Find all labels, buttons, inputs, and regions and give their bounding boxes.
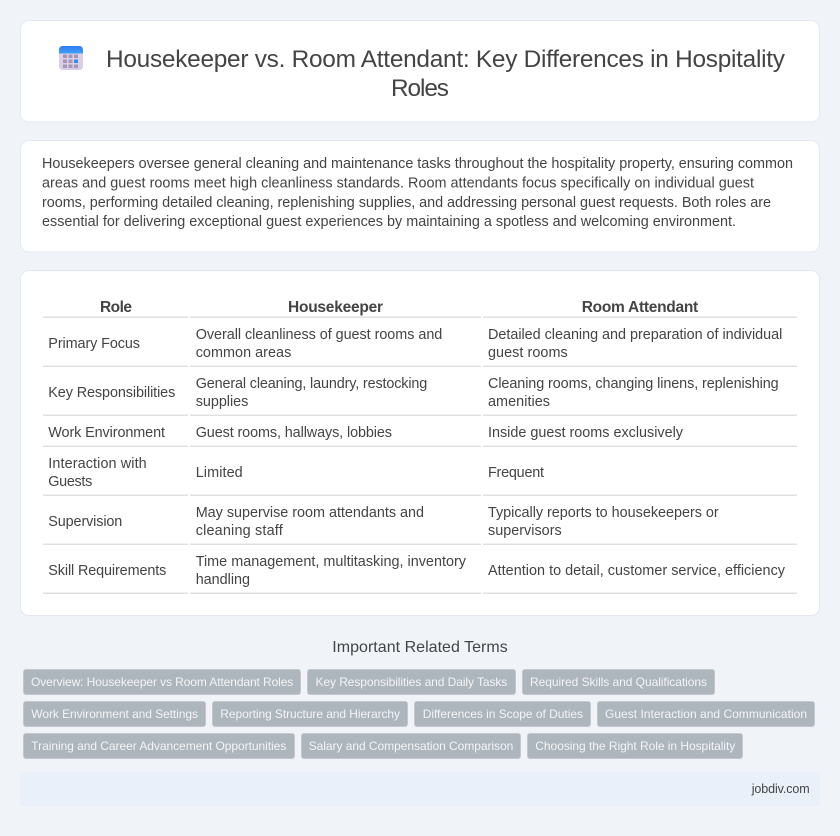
text block: introduction paragraph: Housekeepers oversee general cleaning and maintenance tasks throughout the hospitality property, ensuring common [42,156,793,172]
tag [522,670,714,694]
tag [308,670,516,694]
table row: supervision [43,505,797,545]
related terms tags [24,670,814,758]
icon: calendar [59,46,83,70]
table row: interaction with guests: Limited [196,465,243,481]
footer source text: jobdiv.com [751,782,810,796]
text block: introduction paragraph: rooms, performing detailed cleaning, replenishing supplies, and addressing personal guest requests. Both roles are [42,195,771,211]
tag: Differences in Scope of Duties [423,707,583,721]
tag: Required Skills and Qualifications [530,675,707,689]
tag: Overview: Housekeeper vs Room Attendant Roles [31,675,293,689]
table row: primary focus: common areas [196,345,291,361]
table row: skill requirements: handling [196,572,250,588]
table row: key responsibilities: supplies [196,394,248,410]
table row: key responsibilities: Key Responsibilities [48,385,175,401]
table row: key responsibilities [43,376,797,416]
table row: interaction with guests: Guests [48,474,92,490]
tag: Salary and Compensation Comparison [309,739,513,753]
table header row: Housekeeper [288,299,383,316]
table row: work environment: Inside guest rooms exclusively [488,425,684,441]
text block: introduction paragraph: essential for delivering exceptional guest experiences by maintaining a spotless and welcoming environment. [42,214,736,230]
tag: Choosing the Right Role in Hospitality [535,739,735,753]
table row: supervision: May supervise room attendants and [196,505,424,521]
table row: key responsibilities: Cleaning rooms, changing linens, replenishing [488,376,779,392]
title [106,46,786,102]
table header row [43,299,797,318]
table row: skill requirements [43,554,797,594]
text block: introduction paragraph [42,156,793,230]
table row: work environment [43,425,797,447]
table row: skill requirements: Skill Requirements [48,563,166,579]
table row: skill requirements: Attention to detail, customer service, efficiency [488,563,786,579]
tag: Training and Career Advancement Opportunities [31,739,286,753]
table row: supervision: Typically reports to housekeepers or [488,505,719,521]
table row: work environment: Guest rooms, hallways, lobbies [196,425,392,441]
footer bar [20,772,820,806]
tag [528,734,742,758]
panel: comparison table [20,270,820,616]
table row: key responsibilities: General cleaning, laundry, restocking [196,376,427,392]
tag [212,702,408,726]
table row: interaction with guests: Frequent [488,465,544,481]
table row: interaction with guests [43,456,797,496]
table row: skill requirements: Time management, multitasking, inventory [196,554,467,570]
tag: Key Responsibilities and Daily Tasks [316,675,507,689]
text block: introduction paragraph: areas and guest rooms meet high cleanliness standards. Room attendants focus specifically on individual guest [42,176,754,192]
table header row: Role [100,299,132,316]
heading: important related terms: Important Related Terms [332,639,508,656]
title: Housekeeper vs. Room Attendant: Key Differences in Hospitality [106,46,786,73]
panel: introduction [20,140,820,252]
tag [598,702,814,726]
tag [302,734,520,758]
table row: primary focus: Overall cleanliness of guest rooms and [196,327,442,343]
table row: supervision: Supervision [48,514,122,530]
table row: primary focus [43,327,797,367]
tag [24,734,294,758]
title: Roles [391,75,449,102]
table row: key responsibilities: amenities [488,394,550,410]
tag: Work Environment and Settings [31,707,198,721]
tag: Reporting Structure and Hierarchy [220,707,400,721]
tag [24,702,206,726]
table row: interaction with guests: Interaction with [48,456,147,472]
tag: Guest Interaction and Communication [605,707,807,721]
table row: supervision: supervisors [488,523,562,539]
panel: header [20,20,820,122]
table row: primary focus: guest rooms [488,345,568,361]
table row: work environment: Work Environment [48,425,165,441]
table row: primary focus: Detailed cleaning and preparation of individual [488,327,782,343]
table header row: Room Attendant [582,299,698,316]
table row: primary focus: Primary Focus [48,336,140,352]
tag [24,670,300,694]
tag [414,702,590,726]
table row: supervision: cleaning staff [196,523,284,539]
